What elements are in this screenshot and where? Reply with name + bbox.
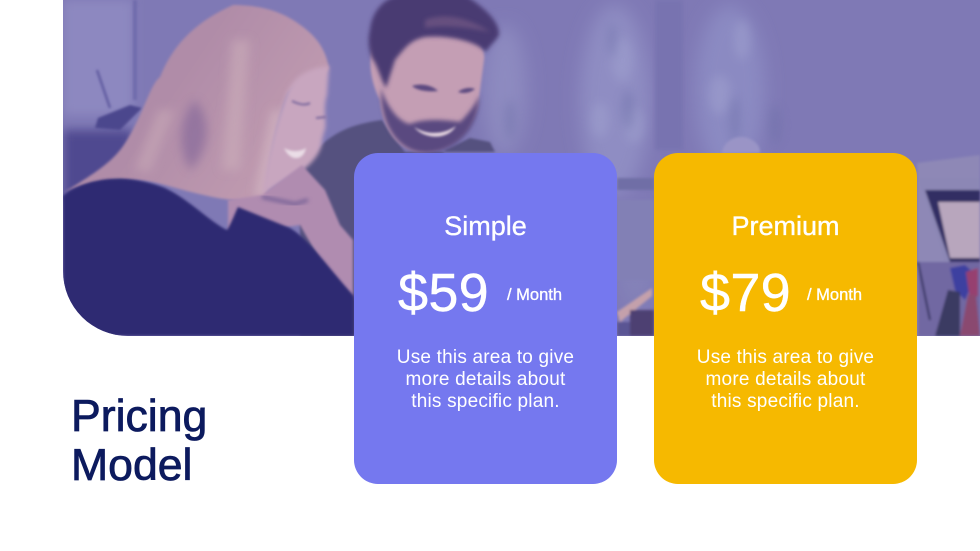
man neck and face [370,23,484,152]
background window and plants [483,5,765,310]
panel: simple plan [354,153,617,484]
man hair [369,0,499,88]
title [71,392,207,490]
man shirt [300,120,495,336]
plan description [697,347,874,412]
woman [63,5,354,336]
plan description: Use this area to give [697,347,874,368]
plan description [397,347,574,412]
plan description: this specific plan. [411,391,560,412]
woman hair [63,5,329,201]
monitor right [917,155,980,336]
panel: premium plan [654,153,917,484]
man eyes [412,85,475,93]
price: $79 [700,263,791,323]
woman neck and hand [228,165,353,300]
plan description: this specific plan. [711,391,860,412]
background left wall [63,0,133,200]
plan name: Simple [444,211,527,241]
photo banner: two people looking at a screen, purple tint [63,0,980,336]
billing period: / Month [807,286,862,304]
man [300,0,499,336]
plan description: more details about [406,369,565,390]
background mug and desk items [722,137,760,153]
man beard [381,88,479,153]
billing period: / Month [507,286,562,304]
woman sweater [63,179,354,336]
plan description: Use this area to give [397,347,574,368]
woman face [262,66,329,195]
plan name: Premium [731,211,840,241]
title: Model [71,441,192,490]
plan description: more details about [706,369,865,390]
title: Pricing [71,392,207,441]
price: $59 [398,263,489,323]
